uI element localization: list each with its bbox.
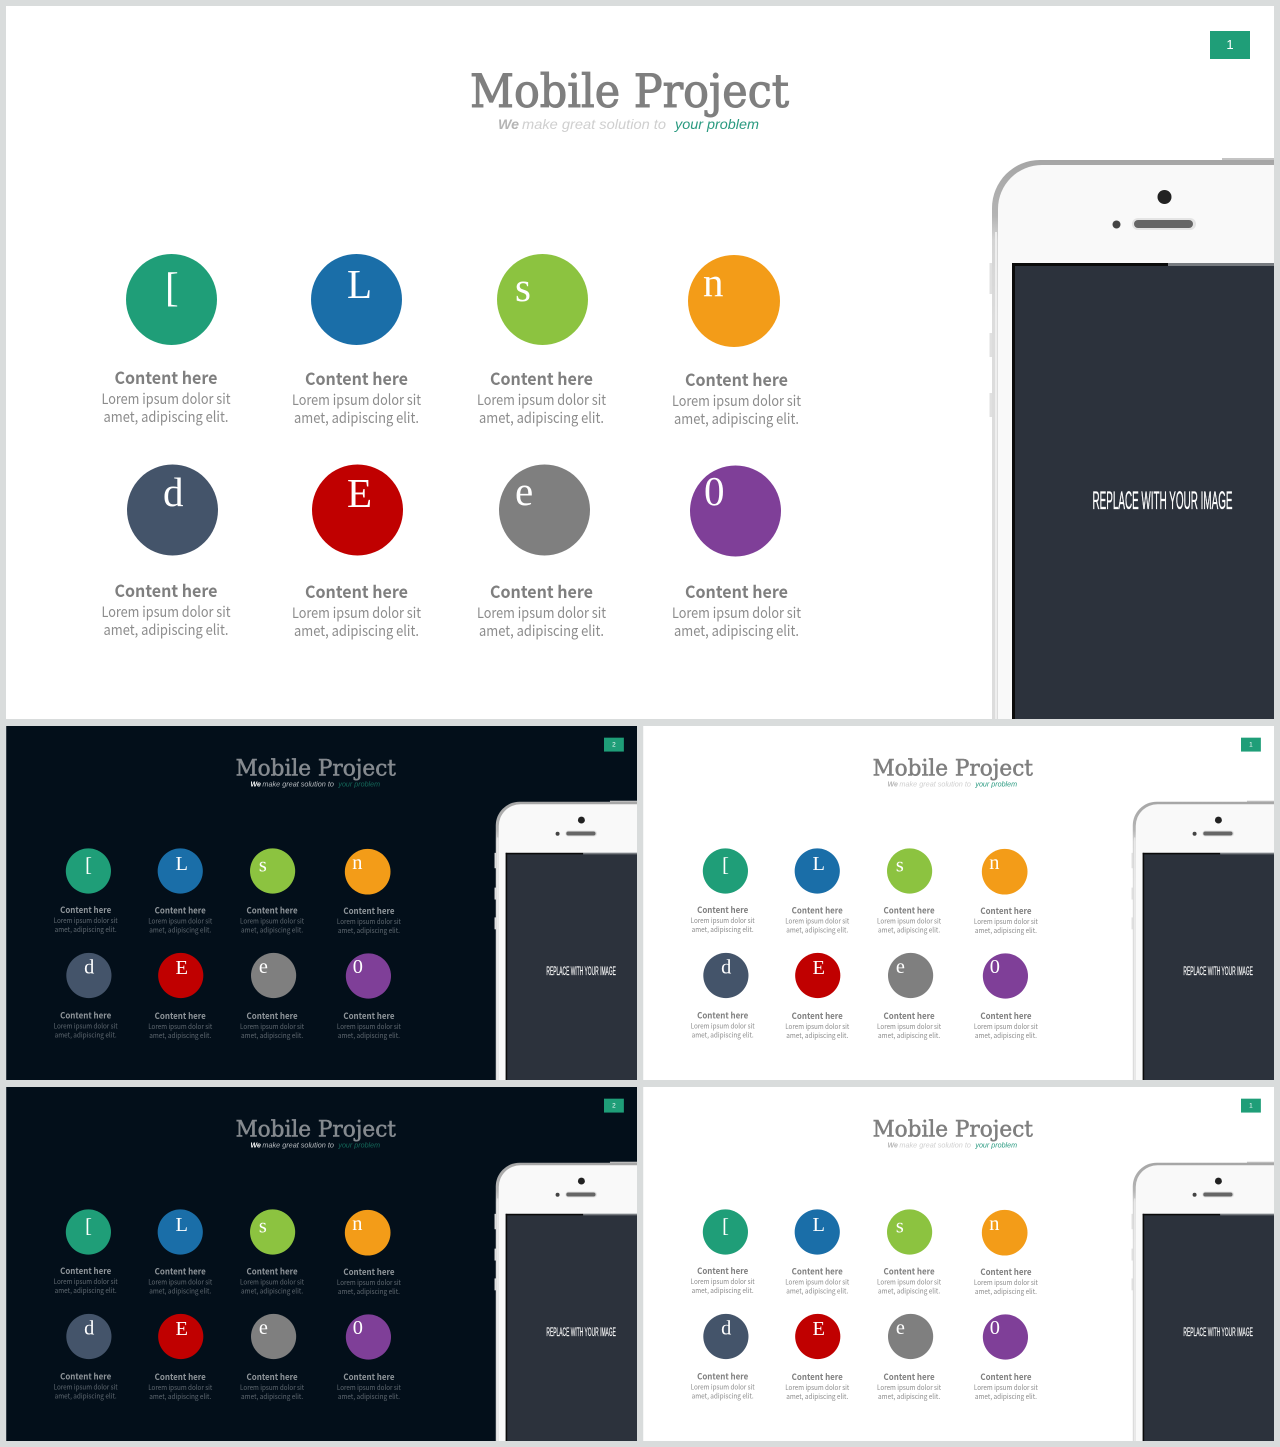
subtitle <box>888 1142 1017 1149</box>
item: red circle: Lorem ipsum dolor sit <box>292 602 421 623</box>
item: slate circle: amet, adipiscing elit. <box>55 1031 117 1041</box>
item: purple circle: Content here <box>343 1371 395 1383</box>
item: green circle: Content here <box>884 904 935 916</box>
item: gray circle: Content here <box>247 1010 298 1022</box>
item: orange circle: n <box>703 259 724 305</box>
item: green circle: s <box>515 264 531 310</box>
page number badge: 2 <box>612 1103 616 1110</box>
item: blue circle: Lorem ipsum dolor sit <box>292 389 421 410</box>
item: orange circle <box>672 255 801 429</box>
item: orange circle: n <box>352 1213 362 1235</box>
item: purple circle: Lorem ipsum dolor sit <box>337 1383 401 1393</box>
item: purple circle: 0 <box>990 1317 1000 1339</box>
item: orange circle: Content here <box>980 1266 1032 1278</box>
item: teal circle: Lorem ipsum dolor sit <box>691 1277 755 1287</box>
item: green circle: Content here <box>247 904 298 916</box>
item: blue circle: Content here <box>305 365 408 390</box>
item: gray circle: amet, adipiscing elit. <box>878 1392 940 1402</box>
item: purple circle: amet, adipiscing elit. <box>338 1392 400 1402</box>
item: green circle: s <box>896 1216 904 1238</box>
item: orange circle: Content here <box>343 1266 395 1278</box>
item: green circle <box>877 848 941 935</box>
item: green circle: Lorem ipsum dolor sit <box>877 1277 941 1287</box>
slide 1: large light slide <box>6 6 1274 719</box>
item: red circle: E <box>813 1318 825 1340</box>
item: purple circle: 0 <box>353 956 363 978</box>
item: teal circle: Content here <box>60 904 111 916</box>
subtitle: make great solution to <box>262 781 334 788</box>
item: blue circle: Content here <box>792 904 843 916</box>
item: slate circle <box>54 953 118 1041</box>
item: gray circle: Content here <box>490 578 593 603</box>
item: slate circle: d <box>721 1318 731 1340</box>
page number badge <box>1241 1099 1261 1113</box>
item: green circle <box>877 1209 941 1296</box>
item: slate circle <box>54 1314 118 1402</box>
item: purple circle: Content here <box>685 578 788 603</box>
item: slate circle: amet, adipiscing elit. <box>692 1031 754 1041</box>
item: red circle: amet, adipiscing elit. <box>149 1392 211 1402</box>
item: green circle <box>240 848 304 935</box>
item: blue circle: amet, adipiscing elit. <box>294 407 419 428</box>
item: red circle <box>292 464 421 641</box>
item: gray circle: amet, adipiscing elit. <box>241 1031 303 1041</box>
item: blue circle: L <box>176 853 188 875</box>
item: purple circle: Content here <box>980 1371 1032 1383</box>
item: teal circle: Content here <box>114 364 218 389</box>
item: slate circle: Lorem ipsum dolor sit <box>102 601 231 622</box>
item: orange circle: amet, adipiscing elit. <box>975 1287 1037 1297</box>
item: gray circle: Lorem ipsum dolor sit <box>877 1022 941 1032</box>
item: gray circle: Content here <box>884 1010 935 1022</box>
item: blue circle: Content here <box>792 1265 843 1277</box>
item: blue circle: Content here <box>155 1265 206 1277</box>
item: red circle: E <box>176 1318 188 1340</box>
item: slate circle: Lorem ipsum dolor sit <box>691 1022 755 1032</box>
item: orange circle: amet, adipiscing elit. <box>338 926 400 936</box>
item: orange circle <box>974 1210 1038 1297</box>
subtitle <box>251 781 380 788</box>
item: gray circle: Lorem ipsum dolor sit <box>240 1383 304 1393</box>
item: teal circle: amet, adipiscing elit. <box>104 406 228 427</box>
item: gray circle: Content here <box>247 1371 298 1383</box>
item: slate circle <box>102 464 231 640</box>
item: gray circle <box>477 464 606 641</box>
item: purple circle: amet, adipiscing elit. <box>975 1031 1037 1041</box>
item: slate circle <box>691 1314 755 1402</box>
item: gray circle: e <box>259 1317 268 1339</box>
item: red circle: amet, adipiscing elit. <box>786 1392 848 1402</box>
subtitle: your problem <box>337 1142 380 1149</box>
title: Mobile Project <box>236 755 396 781</box>
subtitle: your problem <box>674 116 759 132</box>
item: purple circle: amet, adipiscing elit. <box>975 1392 1037 1402</box>
item: slate circle: amet, adipiscing elit. <box>692 1392 754 1402</box>
item: blue circle: L <box>176 1214 188 1236</box>
item: teal circle: [ <box>722 855 729 877</box>
subtitle: your problem <box>974 781 1017 788</box>
item: teal circle: Lorem ipsum dolor sit <box>102 388 231 409</box>
item: teal circle <box>691 848 755 935</box>
item: blue circle: L <box>347 261 372 307</box>
item: teal circle: Content here <box>697 1265 748 1277</box>
item: green circle: Lorem ipsum dolor sit <box>240 916 304 926</box>
page number badge: 1 <box>1249 1103 1253 1110</box>
item: orange circle: n <box>989 1213 999 1235</box>
item: red circle: Content here <box>155 1010 206 1022</box>
subtitle: We <box>888 1142 898 1149</box>
item: teal circle: amet, adipiscing elit. <box>692 925 754 935</box>
item: purple circle <box>672 466 801 641</box>
item: orange circle: Content here <box>343 905 395 917</box>
item: orange circle: n <box>989 852 999 874</box>
page number badge: 1 <box>1249 742 1253 749</box>
item: slate circle: Content here <box>60 1371 111 1383</box>
item: purple circle: Content here <box>980 1010 1032 1022</box>
item: orange circle <box>337 1210 401 1297</box>
item: green circle: amet, adipiscing elit. <box>878 925 940 935</box>
item: orange circle <box>337 849 401 936</box>
item: green circle <box>240 1209 304 1296</box>
item: gray circle: Lorem ipsum dolor sit <box>877 1383 941 1393</box>
item: green circle: Lorem ipsum dolor sit <box>877 916 941 926</box>
item: blue circle <box>785 848 850 935</box>
subtitle: make great solution to <box>522 116 666 132</box>
item: green circle: amet, adipiscing elit. <box>241 1286 303 1296</box>
item: green circle: s <box>259 855 267 877</box>
phone mockup <box>1132 1162 1280 1446</box>
item: teal circle <box>102 254 231 427</box>
item: teal circle: amet, adipiscing elit. <box>692 1286 754 1296</box>
item: red circle: Content here <box>305 578 408 603</box>
slide 4: small dark slide, row 2 <box>6 1087 637 1441</box>
subtitle <box>498 116 759 132</box>
page number badge <box>1241 738 1261 752</box>
item: purple circle <box>974 953 1038 1041</box>
item: gray circle: e <box>896 1317 905 1339</box>
item: green circle: amet, adipiscing elit. <box>479 407 604 428</box>
item: green circle: Content here <box>490 365 593 390</box>
item: purple circle: Lorem ipsum dolor sit <box>672 602 801 623</box>
item: purple circle: amet, adipiscing elit. <box>674 620 799 641</box>
item: slate circle: Content here <box>114 577 218 602</box>
item: blue circle: amet, adipiscing elit. <box>149 1286 211 1296</box>
item: orange circle: amet, adipiscing elit. <box>338 1287 400 1297</box>
phone mockup <box>495 801 649 1085</box>
item: green circle: s <box>259 1216 267 1238</box>
title: Mobile Project <box>470 64 789 118</box>
item: teal circle: amet, adipiscing elit. <box>55 1286 117 1296</box>
item: green circle: Content here <box>884 1265 935 1277</box>
subtitle: We <box>251 781 261 788</box>
item: blue circle <box>785 1209 850 1296</box>
item: blue circle: Lorem ipsum dolor sit <box>785 916 850 926</box>
title: Mobile Project <box>236 1116 396 1142</box>
item: blue circle: amet, adipiscing elit. <box>786 925 848 935</box>
item: red circle: Lorem ipsum dolor sit <box>148 1022 213 1032</box>
item: red circle: Content here <box>792 1371 843 1383</box>
item: red circle: amet, adipiscing elit. <box>294 620 419 641</box>
item: red circle <box>785 953 850 1041</box>
item: gray circle: Lorem ipsum dolor sit <box>477 602 606 623</box>
item: gray circle: e <box>515 468 533 514</box>
item: slate circle: d <box>84 1318 94 1340</box>
item: red circle: Lorem ipsum dolor sit <box>785 1383 850 1393</box>
item: orange circle <box>974 849 1038 936</box>
item: purple circle: Lorem ipsum dolor sit <box>337 1022 401 1032</box>
item: green circle <box>477 254 606 428</box>
item: purple circle <box>337 953 401 1041</box>
item: orange circle: n <box>352 852 362 874</box>
item: green circle: s <box>896 855 904 877</box>
item: teal circle <box>54 848 118 935</box>
item: blue circle: L <box>813 853 825 875</box>
item: purple circle: amet, adipiscing elit. <box>338 1031 400 1041</box>
item: gray circle: amet, adipiscing elit. <box>479 620 604 641</box>
item: teal circle: Lorem ipsum dolor sit <box>691 916 755 926</box>
page number badge <box>604 1099 624 1113</box>
item: teal circle: Content here <box>697 904 748 916</box>
item: orange circle: amet, adipiscing elit. <box>975 926 1037 936</box>
item: blue circle: Content here <box>155 904 206 916</box>
item: purple circle: Lorem ipsum dolor sit <box>974 1022 1038 1032</box>
item: gray circle: e <box>896 956 905 978</box>
page number badge <box>604 738 624 752</box>
item: purple circle: Lorem ipsum dolor sit <box>974 1383 1038 1393</box>
slide 2: small dark slide, row 1 <box>6 726 637 1080</box>
item: gray circle: amet, adipiscing elit. <box>241 1392 303 1402</box>
item: blue circle: Lorem ipsum dolor sit <box>785 1277 850 1287</box>
item: purple circle <box>337 1314 401 1402</box>
title: Mobile Project <box>873 755 1033 781</box>
item: slate circle: Content here <box>697 1371 748 1383</box>
item: gray circle: amet, adipiscing elit. <box>878 1031 940 1041</box>
item: teal circle: Content here <box>60 1265 111 1277</box>
item: purple circle: 0 <box>353 1317 363 1339</box>
item: teal circle: Lorem ipsum dolor sit <box>54 1277 118 1287</box>
item: slate circle: Lorem ipsum dolor sit <box>54 1383 118 1393</box>
item: red circle: Lorem ipsum dolor sit <box>785 1022 850 1032</box>
item: teal circle: [ <box>85 855 92 877</box>
item: teal circle <box>691 1209 755 1296</box>
page number badge <box>1210 31 1250 59</box>
phone mockup <box>1132 801 1280 1085</box>
subtitle: We <box>888 781 898 788</box>
item: red circle: amet, adipiscing elit. <box>149 1031 211 1041</box>
item: slate circle: Lorem ipsum dolor sit <box>691 1383 755 1393</box>
item: red circle: Content here <box>792 1010 843 1022</box>
item: orange circle: Content here <box>980 905 1032 917</box>
title: Mobile Project <box>873 1116 1033 1142</box>
item: green circle: Content here <box>247 1265 298 1277</box>
item: slate circle: amet, adipiscing elit. <box>104 619 228 640</box>
item: orange circle: Lorem ipsum dolor sit <box>337 917 401 927</box>
subtitle: make great solution to <box>899 1142 971 1149</box>
item: teal circle: [ <box>165 264 179 310</box>
phone mockup <box>495 1162 649 1446</box>
item: purple circle: 0 <box>704 468 724 514</box>
subtitle: your problem <box>337 781 380 788</box>
phone mockup <box>990 158 1280 730</box>
slide 5: small light slide, row 2 <box>643 1087 1274 1441</box>
item: red circle: E <box>176 957 188 979</box>
item: teal circle: amet, adipiscing elit. <box>55 925 117 935</box>
item: teal circle <box>54 1209 118 1296</box>
item: gray circle: e <box>259 956 268 978</box>
item: blue circle: amet, adipiscing elit. <box>149 925 211 935</box>
item: orange circle: Lorem ipsum dolor sit <box>337 1278 401 1288</box>
item: gray circle <box>240 1314 304 1402</box>
item: slate circle: d <box>163 469 184 515</box>
item: red circle <box>148 1314 213 1402</box>
item: teal circle: Lorem ipsum dolor sit <box>54 916 118 926</box>
subtitle <box>251 1142 380 1149</box>
item: blue circle: L <box>813 1214 825 1236</box>
item: gray circle: Content here <box>884 1371 935 1383</box>
item: red circle <box>785 1314 850 1402</box>
item: slate circle: d <box>721 957 731 979</box>
item: blue circle: amet, adipiscing elit. <box>786 1286 848 1296</box>
subtitle: make great solution to <box>262 1142 334 1149</box>
item: teal circle: [ <box>85 1216 92 1238</box>
item: red circle: Lorem ipsum dolor sit <box>148 1383 213 1393</box>
item: orange circle: Lorem ipsum dolor sit <box>974 917 1038 927</box>
item: gray circle <box>240 953 304 1041</box>
item: purple circle <box>974 1314 1038 1402</box>
subtitle: We <box>498 116 519 132</box>
item: green circle: Lorem ipsum dolor sit <box>240 1277 304 1287</box>
item: orange circle: Content here <box>685 366 788 391</box>
item: slate circle <box>691 953 755 1041</box>
page number badge: 1 <box>1226 37 1234 52</box>
item: blue circle <box>292 254 421 428</box>
slide 3: small light slide, row 1 <box>643 726 1274 1080</box>
page number badge: 2 <box>612 742 616 749</box>
item: gray circle <box>877 1314 941 1402</box>
item: red circle: amet, adipiscing elit. <box>786 1031 848 1041</box>
subtitle: We <box>251 1142 261 1149</box>
item: blue circle <box>148 848 213 935</box>
item: blue circle: Lorem ipsum dolor sit <box>148 1277 213 1287</box>
item: purple circle: 0 <box>990 956 1000 978</box>
item: gray circle <box>877 953 941 1041</box>
item: purple circle: Content here <box>343 1010 395 1022</box>
subtitle: your problem <box>974 1142 1017 1149</box>
item: red circle: Content here <box>155 1371 206 1383</box>
item: blue circle <box>148 1209 213 1296</box>
item: orange circle: amet, adipiscing elit. <box>674 408 799 429</box>
item: teal circle: [ <box>722 1216 729 1238</box>
item: green circle: amet, adipiscing elit. <box>241 925 303 935</box>
item: slate circle: Content here <box>60 1010 111 1022</box>
item: slate circle: amet, adipiscing elit. <box>55 1392 117 1402</box>
item: green circle: Lorem ipsum dolor sit <box>477 389 606 410</box>
subtitle <box>888 781 1017 788</box>
item: red circle: E <box>813 957 825 979</box>
subtitle: make great solution to <box>899 781 971 788</box>
item: red circle <box>148 953 213 1041</box>
item: slate circle: d <box>84 957 94 979</box>
item: green circle: amet, adipiscing elit. <box>878 1286 940 1296</box>
item: orange circle: Lorem ipsum dolor sit <box>974 1278 1038 1288</box>
item: red circle: E <box>347 470 372 516</box>
item: orange circle: Lorem ipsum dolor sit <box>672 390 801 411</box>
item: slate circle: Lorem ipsum dolor sit <box>54 1022 118 1032</box>
item: gray circle: Lorem ipsum dolor sit <box>240 1022 304 1032</box>
item: slate circle: Content here <box>697 1010 748 1022</box>
item: blue circle: Lorem ipsum dolor sit <box>148 916 213 926</box>
